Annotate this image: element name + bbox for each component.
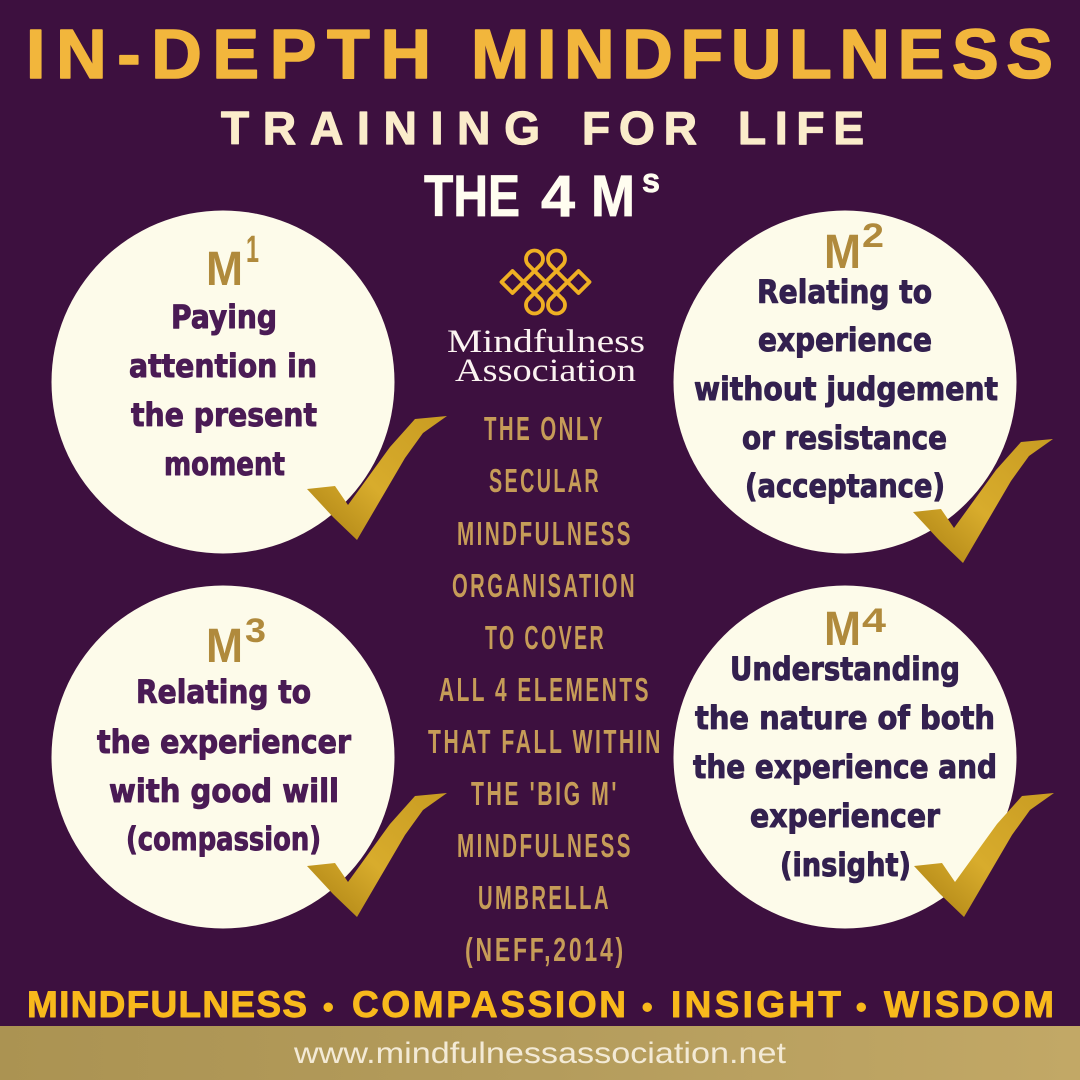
subtitle	[221, 102, 864, 154]
M3 text	[97, 673, 351, 858]
center text column: MINDFULNESS	[457, 827, 633, 864]
panel: M2	[674, 210, 1016, 554]
center text column: UMBRELLA	[478, 879, 611, 916]
center text column: (NEFF,2014)	[465, 931, 626, 968]
center text column	[428, 410, 663, 968]
tagline: •	[856, 991, 867, 1024]
subtitle: FOR	[582, 102, 697, 154]
M2 text: (acceptance)	[745, 467, 945, 505]
M2 text: Relating to	[757, 273, 932, 311]
M4 label: 4	[862, 602, 886, 640]
icon: check M4	[914, 793, 1054, 917]
M2 text: without judgement	[694, 370, 998, 408]
M1 label: 1	[246, 229, 259, 271]
logo wordmark: Mindfulness	[447, 324, 645, 360]
M4 text: the experience and	[693, 748, 997, 786]
tagline: MINDFULNESS	[27, 984, 307, 1025]
M1 label	[206, 229, 259, 296]
center text column: THAT FALL WITHIN	[428, 723, 663, 760]
center text column: THE 'BIG M'	[471, 775, 619, 812]
M2 text: or resistance	[742, 419, 947, 457]
M4 text	[693, 650, 997, 884]
M1 text: Paying	[171, 298, 277, 336]
M3 label: 3	[245, 612, 266, 650]
title: MINDFULNESS	[471, 15, 1053, 93]
panel: M3	[52, 586, 394, 928]
M2 label: 2	[862, 217, 884, 255]
M4 label	[824, 602, 886, 656]
icon: check M2	[913, 439, 1053, 563]
heading: the 4 Ms	[424, 162, 660, 229]
M4 text: Understanding	[730, 650, 960, 688]
M1 text: moment	[164, 445, 285, 483]
M1 label: M	[206, 243, 243, 296]
M4 label: M	[824, 603, 861, 656]
panel: M4	[674, 586, 1016, 928]
subtitle: LIFE	[738, 102, 864, 154]
M4 text: (insight)	[780, 846, 911, 884]
center text column: THE ONLY	[484, 410, 605, 447]
M1 text: the present	[131, 396, 317, 434]
M2 label: M	[824, 226, 861, 279]
heading: the 4 Ms: 4	[541, 164, 575, 229]
logo wordmark: Association	[455, 353, 636, 389]
center text column: SECULAR	[489, 462, 601, 499]
M3 text: Relating to	[136, 673, 311, 711]
icon: check M3	[307, 793, 447, 917]
icon: check M1	[307, 416, 447, 540]
panel: M1	[52, 210, 394, 554]
logo wordmark	[447, 324, 645, 389]
center text column: ORGANISATION	[452, 567, 637, 604]
tagline: COMPASSION	[352, 984, 626, 1025]
M2 text	[694, 273, 998, 505]
M4 text: the nature of both	[695, 699, 995, 737]
center text column: ALL 4 ELEMENTS	[439, 671, 651, 708]
icon: endless knot logo	[502, 250, 590, 314]
tagline	[27, 984, 1054, 1025]
heading: the 4 Ms: s	[642, 162, 660, 200]
M3 text: (compassion)	[126, 820, 321, 858]
M3 label: M	[206, 620, 243, 673]
tagline: •	[642, 991, 653, 1024]
center text column: MINDFULNESS	[457, 515, 633, 552]
website url: www.mindfulnessassociation.net	[293, 1037, 787, 1070]
M3 text: with good will	[109, 772, 339, 810]
M1 text: attention in	[129, 347, 317, 385]
M2 text: experience	[758, 321, 932, 359]
footer band	[0, 1026, 1080, 1080]
M2 label	[824, 217, 884, 279]
heading: the 4 Ms: THE	[424, 164, 520, 229]
M1 text	[129, 298, 317, 483]
tagline: •	[323, 991, 334, 1024]
title	[26, 15, 1053, 93]
subtitle: TRAINING	[221, 102, 540, 154]
M4 text: experiencer	[750, 797, 940, 835]
tagline: INSIGHT	[671, 984, 841, 1025]
tagline: WISDOM	[884, 984, 1054, 1025]
M3 label	[206, 612, 266, 673]
M3 text: the experiencer	[97, 723, 351, 761]
center text column: TO COVER	[485, 619, 606, 656]
title: IN-DEPTH	[26, 15, 431, 93]
heading: the 4 Ms: M	[591, 164, 635, 229]
